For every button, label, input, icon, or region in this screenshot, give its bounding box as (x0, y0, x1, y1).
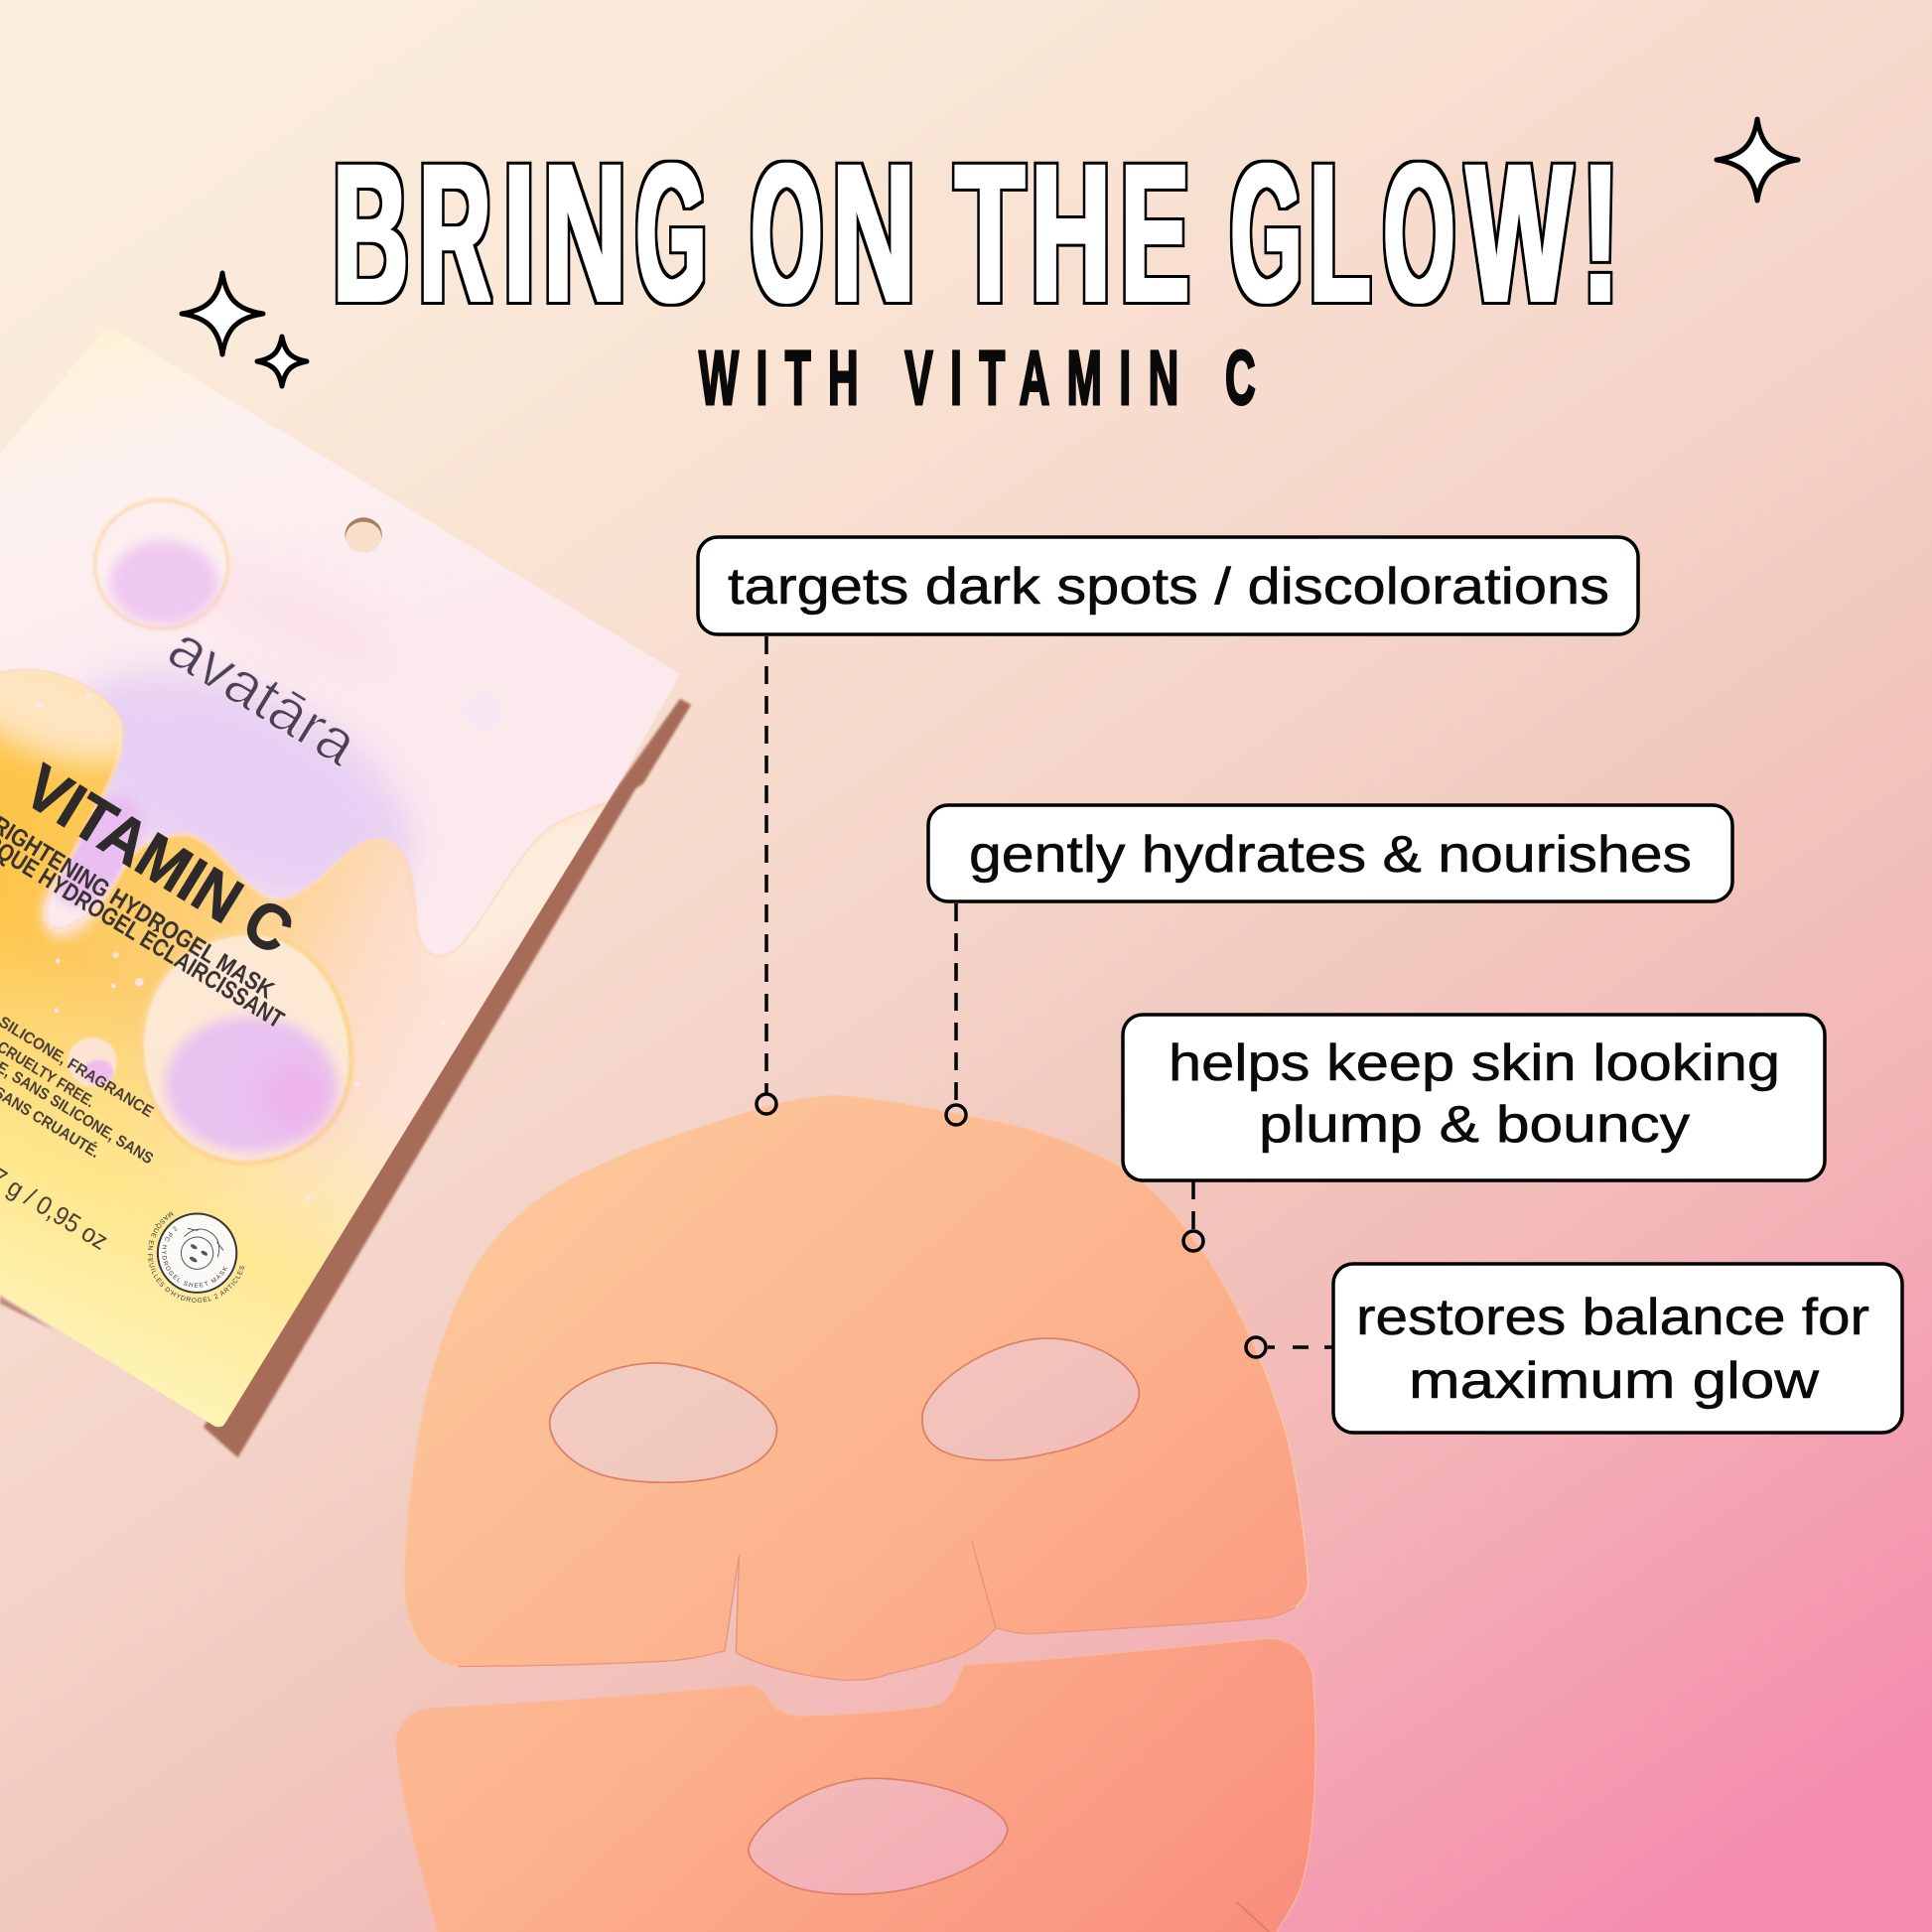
seal badge: MASQUE EN FEUILLES D'HYDROGEL 2 ARTICLES (147, 1211, 244, 1303)
upper mask sheet (404, 1096, 1309, 1680)
faint droplet (460, 689, 509, 733)
connector line (1246, 1337, 1332, 1357)
label box (1333, 1264, 1902, 1433)
title: I (503, 123, 534, 343)
sachet body (0, 365, 680, 1428)
lavender glow (85, 663, 418, 897)
title: O (751, 123, 822, 343)
connector line (757, 636, 776, 1114)
label box (1123, 1015, 1825, 1180)
label text: restores balance for (1356, 1289, 1869, 1346)
brand name: avatāra (157, 613, 369, 779)
connector line (1183, 1181, 1203, 1251)
title: R (419, 123, 490, 343)
label box (698, 537, 1638, 634)
top droplet (95, 500, 228, 628)
title: L (1310, 123, 1371, 343)
title: N (543, 123, 626, 343)
title: N (832, 123, 915, 343)
title (333, 123, 1619, 343)
icon: small sparkle left (257, 337, 307, 386)
title: E (1121, 123, 1189, 343)
title: G (1231, 123, 1302, 343)
sachet lower-left shadow (0, 1297, 56, 1330)
mask lower edge and nose cuts (458, 1541, 1296, 1680)
claims text: SILICONE, FRAGRANCE (0, 1013, 157, 1121)
callout: dark spots (698, 537, 1638, 1114)
small droplet (68, 1037, 117, 1087)
product sachet (0, 280, 717, 1483)
finger lilac (54, 794, 145, 909)
callout: hydrates (928, 805, 1732, 1125)
title: T (955, 123, 1025, 343)
title: W (1466, 123, 1572, 343)
label text: gently hydrates & nourishes (969, 826, 1692, 884)
icon: large sparkle top right (1717, 119, 1798, 201)
seal badge: 2 PC HYDROGEL SHEET MASK (162, 1226, 228, 1288)
icon: large sparkle left (182, 273, 263, 354)
title: ! (1583, 123, 1619, 343)
large droplet (142, 933, 351, 1164)
eye outlines (550, 1338, 1140, 1482)
label text: maximum glow (1409, 1352, 1820, 1410)
pink glow (224, 571, 360, 651)
speckles (36, 693, 446, 1200)
mouth outline and chin cut (749, 1778, 1270, 1932)
product name: VITAMIN C (13, 751, 305, 968)
golden drip layer (0, 671, 634, 1442)
label box (928, 805, 1732, 901)
connector line (946, 903, 966, 1125)
callout: balance (1246, 1264, 1902, 1433)
title: G (636, 123, 706, 343)
label text: helps keep skin looking (1169, 1035, 1780, 1092)
sachet shadow (204, 699, 691, 1457)
title: H (1031, 123, 1111, 343)
yellow lower fade (0, 953, 395, 1428)
title: B (333, 123, 408, 343)
label text: plump & bouncy (1259, 1096, 1690, 1154)
title: O (1384, 123, 1454, 343)
hydrogel face mask (396, 1096, 1315, 1932)
callout: plump (1123, 1015, 1825, 1251)
lower mask sheet (396, 1638, 1315, 1932)
label text: targets dark spots / discolorations (728, 558, 1609, 616)
sachet base colour (0, 321, 690, 1442)
drip highlights (0, 622, 626, 987)
hang hole (345, 517, 382, 553)
subtitle: WITH VITAMIN C (699, 337, 1273, 421)
